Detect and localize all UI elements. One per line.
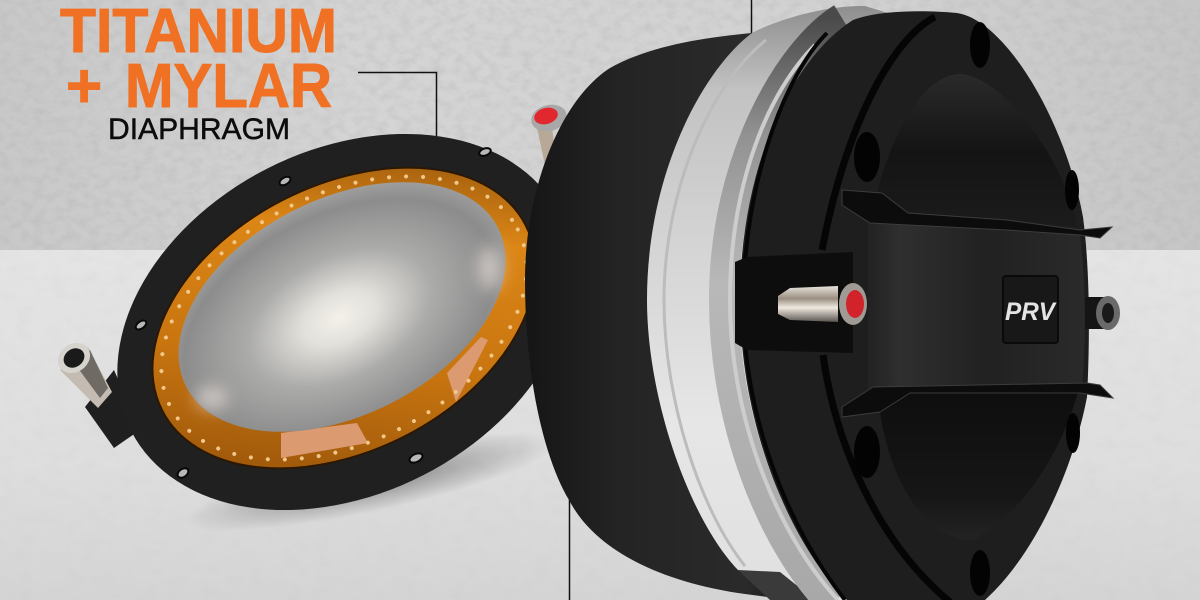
heading: TITANIUM + MYLAR DIAPHRAGM: + [66, 52, 102, 121]
black gasket ring [53, 60, 637, 584]
flange ridge: upper [822, 17, 935, 250]
callout line: diaphragm [358, 72, 436, 136]
background: concrete wall [0, 0, 1200, 252]
chrome ring [724, 18, 842, 600]
heading: TITANIUM + MYLAR DIAPHRAGM: MYLAR [125, 52, 332, 121]
silver band [647, 6, 888, 600]
logo badge: PRV: PRV [1005, 298, 1057, 326]
terminal: red [778, 283, 867, 325]
rear housing [525, 33, 800, 600]
bracket: upper [842, 190, 1112, 238]
callout line: top [750, 0, 752, 34]
barrel black edge [743, 33, 845, 600]
driver [525, 6, 1120, 600]
dome reflections [196, 246, 502, 410]
chrome ring highlight [730, 45, 838, 600]
gasket mounting holes [134, 147, 492, 480]
ground shadow [178, 413, 562, 551]
background: floor [0, 250, 1200, 600]
rivet ring [114, 119, 574, 517]
dome: upper [870, 74, 1078, 228]
copper patches [281, 337, 488, 458]
bracket: lower [842, 383, 1113, 417]
icon: top terminal [528, 101, 570, 165]
mounting holes [854, 22, 1080, 596]
heading: TITANIUM + MYLAR DIAPHRAGM: DIAPHRAGM [108, 113, 290, 146]
terminal block [735, 252, 853, 353]
dome: lower [880, 392, 1078, 540]
orange mylar ring [102, 107, 586, 529]
front face [740, 11, 1089, 600]
diaphragm [52, 60, 637, 584]
label strip [738, 570, 815, 600]
titanium dome [137, 131, 547, 483]
terminal: black [1085, 296, 1120, 330]
icon: left terminal [52, 337, 140, 448]
dome: middle [868, 220, 1085, 392]
flange ridge: lower [823, 355, 950, 600]
heading: TITANIUM + MYLAR DIAPHRAGM [60, 0, 337, 146]
logo badge: PRV [1003, 276, 1058, 343]
band inner stripe [664, 40, 766, 566]
callout line: bottom [568, 495, 570, 600]
